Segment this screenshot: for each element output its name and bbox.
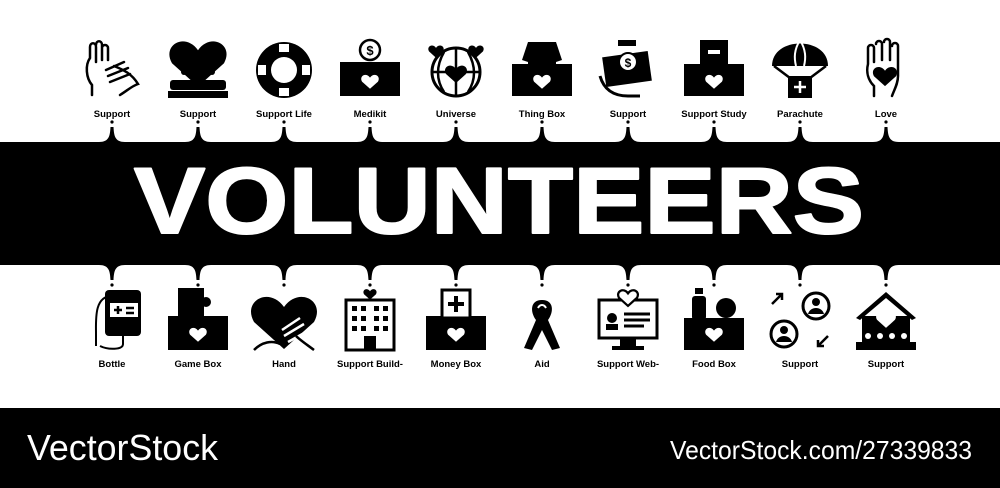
bottom labels: Support Build- [337,359,403,370]
icon: support exchange [771,293,829,347]
icon: support study [684,40,744,96]
icon: life ring [256,42,312,98]
icon: hand heart [251,297,317,350]
icon: love hand [867,39,898,96]
footer [0,408,1000,488]
icon: support hands [87,41,138,95]
icon: support people heart [168,41,228,98]
bottom labels: Money Box [431,359,482,370]
top labels: Universe [436,109,476,120]
icon: support money: $ [625,56,632,70]
top labels [94,109,897,120]
icon: building [346,289,394,350]
top labels: Support [94,109,131,120]
top labels: Medikit [354,109,387,120]
footer: VectorStock [27,427,219,468]
icon: medikit [340,40,400,96]
icon: support house [856,292,916,350]
icon: support money [600,40,652,96]
banner band [0,142,1000,265]
bottom labels: Game Box [174,359,222,370]
bottom labels: Hand [272,359,296,370]
icon: food box [684,288,744,350]
icon: money box [426,290,486,350]
bottom labels [99,359,905,370]
top labels: Support Study [681,109,747,120]
footer: VectorStock.com/27339833 [670,435,972,465]
icon: universe globe [428,46,484,96]
icon: support web [599,290,657,350]
top labels: Support [610,109,647,120]
bottom labels: Aid [534,359,550,370]
top labels: Support [180,109,217,120]
bottom labels: Food Box [692,359,737,370]
bottom labels: Support [868,359,905,370]
icon: parachute [772,40,828,98]
icon: aid ribbon [524,300,560,350]
top labels: Support Life [256,109,312,120]
bottom labels: Support Web- [597,359,659,370]
icon: thing box [512,42,572,96]
connectors [99,120,899,287]
top labels: Love [875,109,897,120]
bottom labels: Bottle [99,359,125,370]
icon: bottle (iv bag) [96,290,141,349]
top labels: Parachute [777,109,823,120]
icon: medikit: $ [366,43,374,58]
top labels: Thing Box [519,109,566,120]
bottom labels: Support [782,359,819,370]
icon: game box [168,288,228,350]
title: VOLUNTEERS [134,148,864,253]
